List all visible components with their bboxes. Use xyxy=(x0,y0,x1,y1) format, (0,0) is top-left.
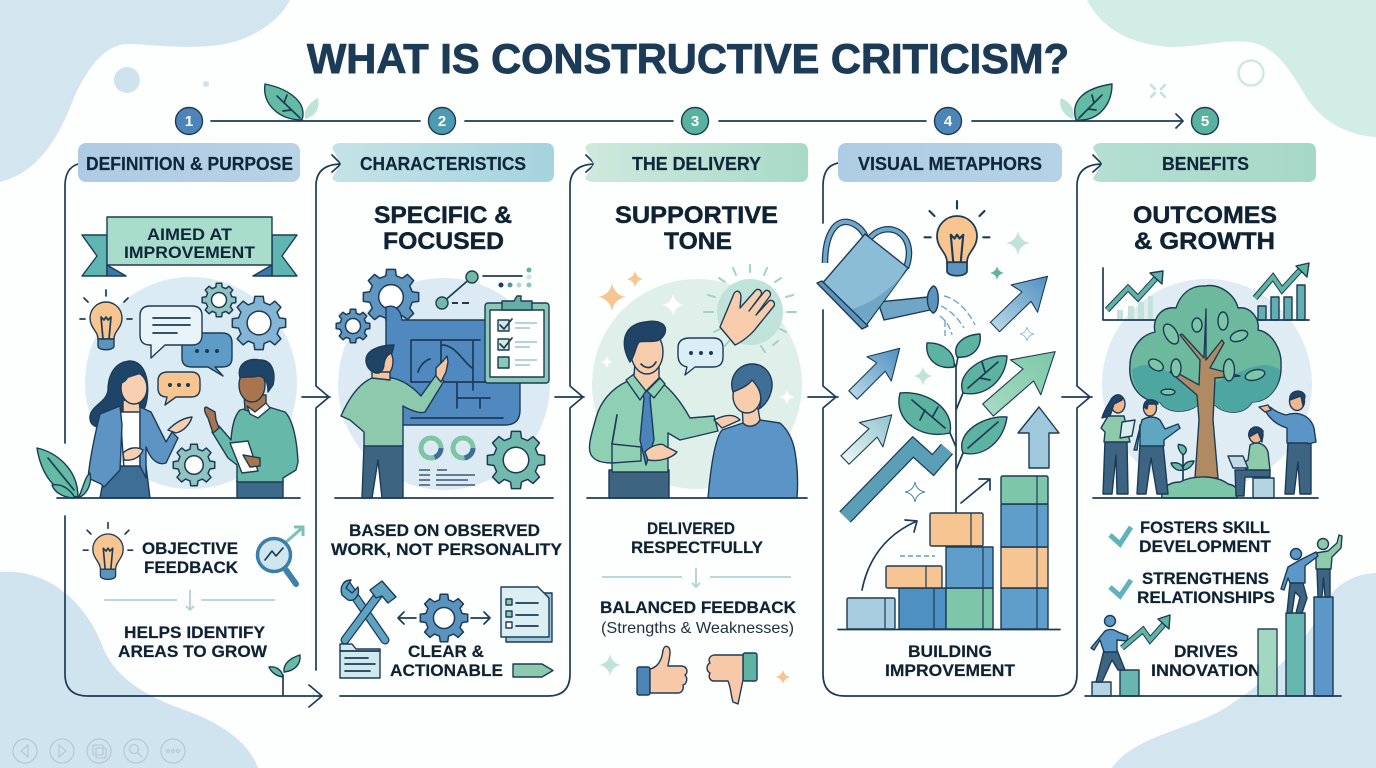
clipboard checklist xyxy=(485,296,549,383)
icon: folder xyxy=(340,644,380,678)
decorative blob: bottom right xyxy=(1112,573,1376,768)
decorative blob: bottom left xyxy=(0,572,258,768)
step 2: 2 xyxy=(438,113,446,130)
slides button xyxy=(87,739,111,763)
header: benefits xyxy=(1093,143,1316,182)
header: the delivery: THE DELIVERY xyxy=(632,154,761,174)
icon: magnifier xyxy=(258,527,303,584)
icon: watering can xyxy=(817,222,975,336)
person: man in green sweater xyxy=(205,360,298,498)
icon: light bulb xyxy=(924,201,990,276)
ground line xyxy=(1093,497,1318,499)
panel: the delivery xyxy=(585,143,808,704)
donut charts xyxy=(421,438,473,458)
lower text: objective feedback: OBJECTIVE xyxy=(142,539,238,558)
check mark xyxy=(1110,580,1131,596)
header: definition and purpose: DEFINITION & PURPOSE xyxy=(86,154,293,174)
bar chart with climbing people xyxy=(1085,535,1342,696)
icon: gears xyxy=(173,283,286,486)
small rising arrows xyxy=(862,479,990,590)
leaf cluster xyxy=(37,448,90,498)
benefit list: STRENGTHENS xyxy=(1142,569,1269,588)
lower text: based on observed work: BASED ON OBSERVED xyxy=(349,521,540,540)
ground line xyxy=(57,497,300,499)
stacked blocks xyxy=(847,476,1048,629)
chart: left growth xyxy=(1103,268,1163,320)
person: colleague in blue xyxy=(708,364,798,498)
lower text: objective feedback xyxy=(83,523,303,695)
lower text: based on observed work: WORK, NOT PERSONALITY xyxy=(331,540,563,559)
step 1 xyxy=(176,108,202,134)
search button xyxy=(124,739,148,763)
decorative blob: top left xyxy=(0,0,290,182)
panel: definition and purpose xyxy=(37,143,303,695)
timeline connector lines xyxy=(211,114,1183,128)
banner: aimed at improvement: IMPROVEMENT xyxy=(124,243,256,262)
heading: outcomes and growth: OUTCOMES xyxy=(1133,202,1277,229)
chart: right growth xyxy=(1255,263,1309,320)
network nodes xyxy=(436,268,532,309)
benefit list: DEVELOPMENT xyxy=(1139,537,1272,556)
check mark xyxy=(1110,527,1131,544)
header: visual metaphors xyxy=(838,143,1062,182)
navigation controls xyxy=(13,739,185,763)
benefit list: FOSTERS SKILL xyxy=(1140,518,1270,537)
growth arrows xyxy=(833,263,1070,517)
header: the delivery xyxy=(585,143,808,182)
tree xyxy=(1130,286,1281,478)
lower text: objective feedback: AREAS TO GROW xyxy=(118,642,268,661)
header: visual metaphors: VISUAL METAPHORS xyxy=(858,154,1042,174)
panel: benefits xyxy=(1085,143,1342,696)
sparkles xyxy=(905,231,1034,502)
heading: specific and focused xyxy=(374,202,512,255)
previous button xyxy=(13,739,37,763)
illustration: team around growing tree xyxy=(1093,263,1318,498)
leaf: left timeline xyxy=(265,84,318,120)
icon: sprout xyxy=(269,655,300,695)
arrows xyxy=(398,612,490,624)
icon: pencil xyxy=(513,664,553,677)
next button xyxy=(50,739,74,763)
step 1: 1 xyxy=(185,113,193,130)
step 3 xyxy=(682,108,708,134)
lower text: delivered respectfully xyxy=(599,519,797,704)
caption: building improvement: BUILDING xyxy=(908,642,992,661)
plant xyxy=(899,334,1007,513)
person: manager in green shirt xyxy=(589,321,740,498)
lower text: delivered respectfully: RESPECTFULLY xyxy=(631,538,764,557)
benefit list: INNOVATION xyxy=(1151,661,1261,680)
text backing xyxy=(1150,640,1263,685)
divider arrow xyxy=(104,590,275,610)
illustration: man reviewing blueprint xyxy=(335,268,553,498)
lower text: based on observed work xyxy=(331,521,563,680)
heading: supportive tone: TONE xyxy=(664,228,732,255)
banner: aimed at improvement: AIMED AT xyxy=(147,225,233,244)
sparkles xyxy=(598,270,794,404)
person: standing on top bar xyxy=(1316,535,1342,597)
decorative dots xyxy=(114,60,1264,97)
person: seated with laptop xyxy=(1228,427,1274,498)
lower text: based on observed work: ACTIONABLE xyxy=(390,661,503,680)
person: man in blue xyxy=(1134,400,1180,494)
bush and sprout xyxy=(1162,444,1238,498)
data lines xyxy=(419,470,475,485)
decorative blob: top right xyxy=(1087,0,1376,137)
icon: supportive hand with glow xyxy=(704,265,796,352)
lower text: delivered respectfully: BALANCED FEEDBACK xyxy=(600,598,797,617)
header: benefits: BENEFITS xyxy=(1162,154,1249,174)
step 4: 4 xyxy=(944,113,953,130)
lower text: objective feedback: HELPS IDENTIFY xyxy=(124,623,266,642)
step 5 xyxy=(1192,108,1218,134)
illustration: manager encouraging colleague xyxy=(587,265,807,498)
step 3: 3 xyxy=(691,113,699,130)
leaf: right timeline xyxy=(1060,84,1112,120)
icon: thumbs up xyxy=(637,646,687,695)
ground line xyxy=(1085,695,1341,697)
person: woman in blue jacket xyxy=(88,361,192,498)
icon: gears xyxy=(336,269,545,489)
benefit list: DRIVES xyxy=(1174,642,1238,661)
banner: aimed at improvement xyxy=(82,217,297,276)
caption: building improvement xyxy=(885,642,1016,680)
heading: specific and focused: SPECIFIC & xyxy=(374,202,512,229)
sparkles xyxy=(599,654,790,684)
icon: light bulb xyxy=(80,290,132,350)
benefit list xyxy=(1110,518,1275,685)
illustration: two colleagues talking xyxy=(37,277,300,498)
person: man gesturing xyxy=(1259,391,1316,494)
icon: light bulb small xyxy=(83,523,133,579)
panel frame lines and connecting arrows xyxy=(65,155,1102,707)
person: climbing xyxy=(1281,548,1318,613)
blueprint xyxy=(386,306,520,425)
speech bubble xyxy=(678,338,723,375)
ground line xyxy=(587,497,807,499)
lower text: delivered respectfully: DELIVERED xyxy=(647,519,735,538)
lower text: based on observed work: CLEAR & xyxy=(408,642,484,661)
benefit list: RELATIONSHIPS xyxy=(1137,588,1275,607)
more button xyxy=(161,739,185,763)
step 2 xyxy=(428,108,456,134)
divider arrow xyxy=(602,568,791,587)
icon: wrench and hammer xyxy=(341,580,396,640)
panel: visual metaphors xyxy=(817,143,1070,680)
icon: checklist document xyxy=(501,587,552,642)
header: definition and purpose xyxy=(78,143,300,182)
icon: gear xyxy=(420,594,468,642)
step 5: 5 xyxy=(1201,113,1209,130)
ground line xyxy=(838,628,1060,630)
speech bubbles xyxy=(140,306,232,405)
header: characteristics: CHARACTERISTICS xyxy=(360,154,526,174)
step 4 xyxy=(934,108,962,134)
heading: supportive tone: SUPPORTIVE xyxy=(615,202,778,229)
ground line xyxy=(335,497,553,499)
lower text: objective feedback: FEEDBACK xyxy=(144,558,239,577)
heading: supportive tone xyxy=(615,202,778,255)
title: WHAT IS CONSTRUCTIVE CRITICISM? xyxy=(307,35,1069,82)
icon: thumbs down xyxy=(707,653,757,704)
heading: specific and focused: FOCUSED xyxy=(383,228,504,255)
heading: outcomes and growth: & GROWTH xyxy=(1134,228,1275,255)
person: man pointing at blueprint xyxy=(341,345,448,498)
timeline xyxy=(176,84,1218,134)
caption: building improvement: IMPROVEMENT xyxy=(885,661,1016,680)
person: woman with tablet xyxy=(1101,395,1135,494)
heading: outcomes and growth xyxy=(1133,202,1277,255)
lower text: delivered respectfully: (Strengths & Weaknesses) xyxy=(601,620,794,637)
panel: characteristics xyxy=(331,143,563,680)
header: characteristics xyxy=(332,143,554,182)
steps and climber xyxy=(1091,615,1170,696)
